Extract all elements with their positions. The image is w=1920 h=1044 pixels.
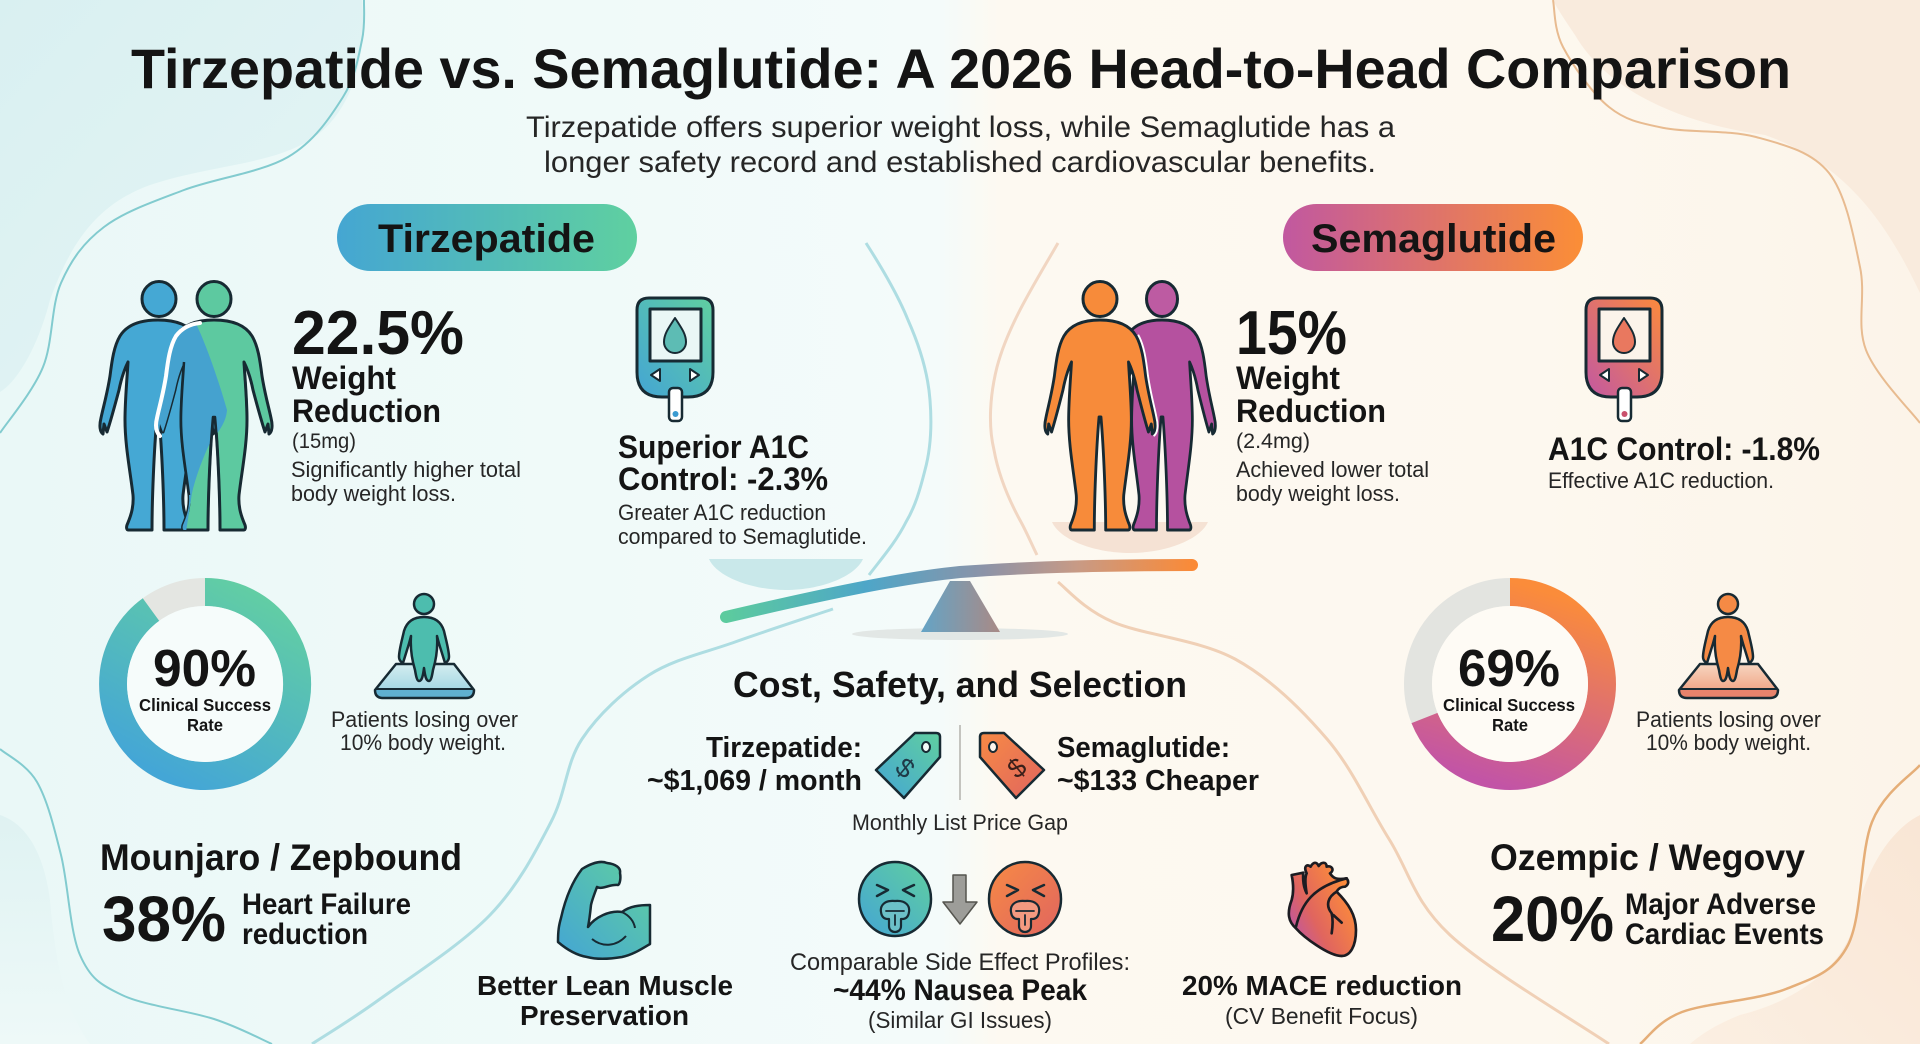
heading pill: Semaglutide <box>1283 204 1583 271</box>
price: tirzepatide: Tirzepatide: <box>706 732 862 764</box>
icon: person on scale <box>375 594 474 698</box>
brand block: Ozempic / Wegovy: 20% <box>1491 883 1614 955</box>
stat: weight reduction: Reduction <box>292 393 441 429</box>
stat: weight reduction: Significantly higher total <box>291 457 521 482</box>
stat: weight reduction: body weight loss. <box>291 481 456 506</box>
label: lean muscle: Better Lean Muscle <box>477 970 733 1001</box>
price: tirzepatide: ~$1,069 / month <box>647 765 862 797</box>
heading pill: Tirzepatide: Tirzepatide <box>378 217 595 261</box>
donut chart: 90% clinical success <box>113 592 297 776</box>
stat: A1C control: A1C Control: -1.8% <box>1548 431 1820 467</box>
title: Tirzepatide vs. Semaglutide: A 2026 Head-to-Head Comparison <box>131 37 1791 100</box>
stat: weight reduction: 22.5% <box>292 299 464 368</box>
donut chart: 69% clinical success: Rate <box>1492 715 1528 735</box>
caption: price gap: Monthly List Price Gap <box>852 810 1068 835</box>
caption: patients losing over 10% <box>1636 707 1821 755</box>
brand block: Ozempic / Wegovy: Cardiac Events <box>1625 918 1824 951</box>
brand block: Mounjaro / Zepbound: 38% <box>102 883 226 955</box>
scale graphic <box>709 559 1192 640</box>
caption: patients losing over 10%: Patients losing over <box>331 707 518 732</box>
label: lean muscle: Preservation <box>520 1000 689 1031</box>
scale pan: left <box>709 559 863 590</box>
icon: flexed arm <box>558 862 650 959</box>
caption: patients losing over 10%: 10% body weight. <box>340 730 506 755</box>
scale pan: right <box>1052 522 1208 553</box>
stat: weight reduction: Weight <box>292 360 396 396</box>
price: semaglutide: Semaglutide: <box>1057 732 1230 764</box>
stat: weight reduction: Achieved lower total <box>1236 457 1429 482</box>
scale shadow <box>852 628 1068 640</box>
panel: cost, safety, and selection <box>647 664 1259 1033</box>
icon: price tag green: $ <box>890 752 920 784</box>
side effects text: Comparable Side Effect Profiles: <box>790 949 1130 976</box>
stat: weight reduction: (2.4mg) <box>1236 430 1310 453</box>
heading pill: Semaglutide: Semaglutide <box>1311 217 1556 261</box>
stat: weight reduction: 15% <box>1236 299 1347 368</box>
brand block: Mounjaro / Zepbound <box>100 837 462 955</box>
subtitle: longer safety record and established cardiovascular benefits. <box>544 146 1376 179</box>
stat: A1C control <box>1548 431 1820 493</box>
icon: two body silhouettes <box>100 282 272 532</box>
side effects text: ~44% Nausea Peak <box>833 974 1087 1007</box>
stat: A1C control: compared to Semaglutide. <box>618 524 867 549</box>
brand block: Ozempic / Wegovy <box>1490 837 1824 955</box>
icon: heart <box>1289 863 1356 956</box>
donut chart: 69% clinical success: 69% <box>1458 640 1560 698</box>
label: MACE reduction <box>1182 970 1462 1029</box>
stat: A1C control: Greater A1C reduction <box>618 500 826 525</box>
caption: patients losing over 10%: 10% body weight. <box>1646 730 1811 755</box>
price: tirzepatide <box>647 732 862 797</box>
label: lean muscle <box>477 970 733 1031</box>
panel: semaglutide <box>1045 204 1824 1029</box>
icon: two body silhouettes <box>1045 282 1215 530</box>
subtitle <box>526 111 1395 179</box>
icon: nauseated face green <box>859 862 931 936</box>
label: MACE reduction: 20% MACE reduction <box>1182 970 1462 1001</box>
panel: tirzepatide <box>100 204 867 1031</box>
icon: price tag green <box>876 733 940 798</box>
brand block: Mounjaro / Zepbound: Mounjaro / Zepbound <box>100 837 462 878</box>
stat: weight reduction: Weight <box>1236 360 1340 396</box>
side effects text <box>790 949 1130 1033</box>
label: MACE reduction: (CV Benefit Focus) <box>1225 1003 1418 1029</box>
donut chart: 90% clinical success: 90% <box>153 640 256 698</box>
stat: weight reduction: body weight loss. <box>1236 481 1400 506</box>
donut chart: 69% clinical success <box>1418 592 1602 776</box>
heading pill: Tirzepatide <box>337 204 637 271</box>
stat: A1C control <box>618 429 867 549</box>
stat: weight reduction: Reduction <box>1236 393 1386 429</box>
caption: patients losing over 10%: Patients losing over <box>1636 707 1821 732</box>
scale fulcrum <box>921 581 1000 632</box>
stat: weight reduction: (15mg) <box>292 430 356 453</box>
brand block: Ozempic / Wegovy: Ozempic / Wegovy <box>1490 837 1805 878</box>
side effects text: (Similar GI Issues) <box>868 1007 1052 1033</box>
icon: person on scale <box>1679 594 1778 698</box>
icon: glucose meter <box>1586 298 1662 421</box>
stat: weight reduction <box>1236 299 1429 506</box>
stat: A1C control: Effective A1C reduction. <box>1548 468 1774 493</box>
price: semaglutide: ~$133 Cheaper <box>1057 765 1259 797</box>
scale beam <box>726 565 1192 617</box>
donut chart: 69% clinical success: Clinical Success <box>1443 695 1575 715</box>
heading: Cost, Safety, and Selection <box>733 664 1187 705</box>
price: semaglutide <box>1057 732 1259 797</box>
icon: nauseated face orange <box>989 862 1061 936</box>
donut chart: 90% clinical success: Clinical Success <box>139 695 271 715</box>
stat: A1C control: Superior A1C <box>618 429 809 465</box>
divider <box>959 725 961 800</box>
donut chart: 90% clinical success: Rate <box>187 715 223 735</box>
icon: glucose meter <box>637 298 713 421</box>
brand block: Ozempic / Wegovy: Major Adverse <box>1625 888 1816 921</box>
icon: price tag orange <box>980 733 1044 798</box>
brand block: Mounjaro / Zepbound: reduction <box>242 918 368 951</box>
stat: A1C control: Control: -2.3% <box>618 461 828 497</box>
brand block: Mounjaro / Zepbound: Heart Failure <box>242 888 411 921</box>
subtitle: Tirzepatide offers superior weight loss, while Semaglutide has a <box>526 111 1395 144</box>
icon: down arrow <box>943 875 977 924</box>
stat: weight reduction <box>291 299 521 506</box>
icon: price tag orange: $ <box>1002 752 1032 784</box>
caption: patients losing over 10% <box>331 707 518 755</box>
